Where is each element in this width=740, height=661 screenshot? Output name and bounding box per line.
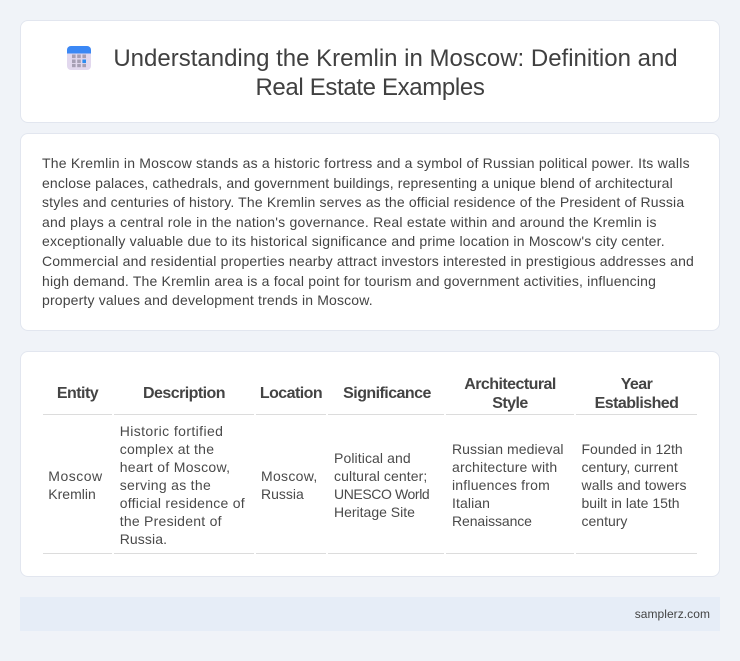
table row: Moscow Kremlin: Renaissance: [452, 513, 532, 529]
text block: introduction: [42, 155, 694, 308]
table row: Moscow Kremlin: cultural center;: [334, 468, 427, 484]
table row: Moscow Kremlin: Kremlin: [48, 486, 96, 502]
text block: introduction: property values and development trends in Moscow.: [42, 292, 373, 308]
table row: Moscow Kremlin: Political and: [334, 450, 411, 466]
table header: Significance: [343, 385, 431, 402]
text block: introduction: Commercial and residential properties nearby attract investors interested in prestigious addresses and: [42, 253, 694, 269]
table header: Established: [595, 395, 678, 412]
table row: Moscow Kremlin: the President of: [120, 513, 222, 529]
table row: Moscow Kremlin: century, current: [582, 459, 678, 475]
text block: introduction: The Kremlin in Moscow stands as a historic fortress and a symbol of Russian political power. Its walls: [42, 155, 690, 171]
text block: introduction: and plays a central role in the nation's governance. Real estate within and around the Kremlin is: [42, 214, 657, 230]
table header: Description: [143, 385, 225, 402]
table row: Moscow Kremlin: influences from: [452, 477, 550, 493]
footer text: samplerz.com: [635, 607, 710, 621]
table row: Moscow Kremlin: architecture with: [452, 459, 557, 475]
panel: table card: [20, 351, 720, 577]
text block: introduction: styles and centuries of history. The Kremlin serves as the official residence of the President of Russia: [42, 194, 684, 210]
table row: Moscow Kremlin: Russia: [261, 486, 304, 502]
table row: Moscow Kremlin: serving as the: [120, 477, 211, 493]
table row: Moscow Kremlin: Founded in 12th: [582, 441, 683, 457]
text block: introduction: enclose palaces, cathedrals, and government buildings, representing a unique blend of architectural: [42, 175, 673, 191]
title: Understanding the Kremlin in Moscow: Definition and: [113, 45, 678, 72]
table header: Architectural: [464, 376, 556, 393]
table row: Moscow Kremlin: built in late 15th: [582, 495, 680, 511]
table header: Year: [621, 376, 652, 393]
table header: Style: [492, 395, 528, 412]
table row: Moscow Kremlin: Moscow: [48, 468, 103, 484]
title: [113, 45, 678, 101]
table row: Moscow Kremlin: walls and towers: [582, 477, 687, 493]
table row: Moscow Kremlin: heart of Moscow,: [120, 459, 230, 475]
table row: Moscow Kremlin: century: [582, 513, 627, 529]
footer bar: [20, 597, 720, 631]
table row: Moscow Kremlin: complex at the: [120, 441, 214, 457]
table row: Moscow Kremlin: Russia.: [120, 531, 167, 547]
table row: Moscow Kremlin: UNESCO World: [334, 486, 429, 502]
text block: introduction: exceptionally valuable due to its historical significance and prime location in Moscow's city center.: [42, 233, 665, 249]
table row: Moscow Kremlin: Moscow,: [261, 468, 318, 484]
panel: title card: [20, 20, 720, 123]
table row: Moscow Kremlin: official residence of: [120, 495, 245, 511]
table header: [43, 376, 697, 415]
table row: Moscow Kremlin: [43, 423, 697, 554]
table row: Moscow Kremlin: Historic fortified: [120, 423, 223, 439]
table header: Entity: [57, 385, 98, 402]
table row: Moscow Kremlin: Italian: [452, 495, 490, 511]
panel: introduction card: [20, 133, 720, 331]
table row: Moscow Kremlin: Russian medieval: [452, 441, 564, 457]
text block: introduction: high demand. The Kremlin area is a focal point for tourism and government activities, influencing: [42, 273, 656, 289]
table row: Moscow Kremlin: Heritage Site: [334, 504, 415, 520]
icon: calendar: [67, 46, 91, 70]
table header: Location: [260, 385, 322, 402]
title: Real Estate Examples: [255, 74, 485, 101]
